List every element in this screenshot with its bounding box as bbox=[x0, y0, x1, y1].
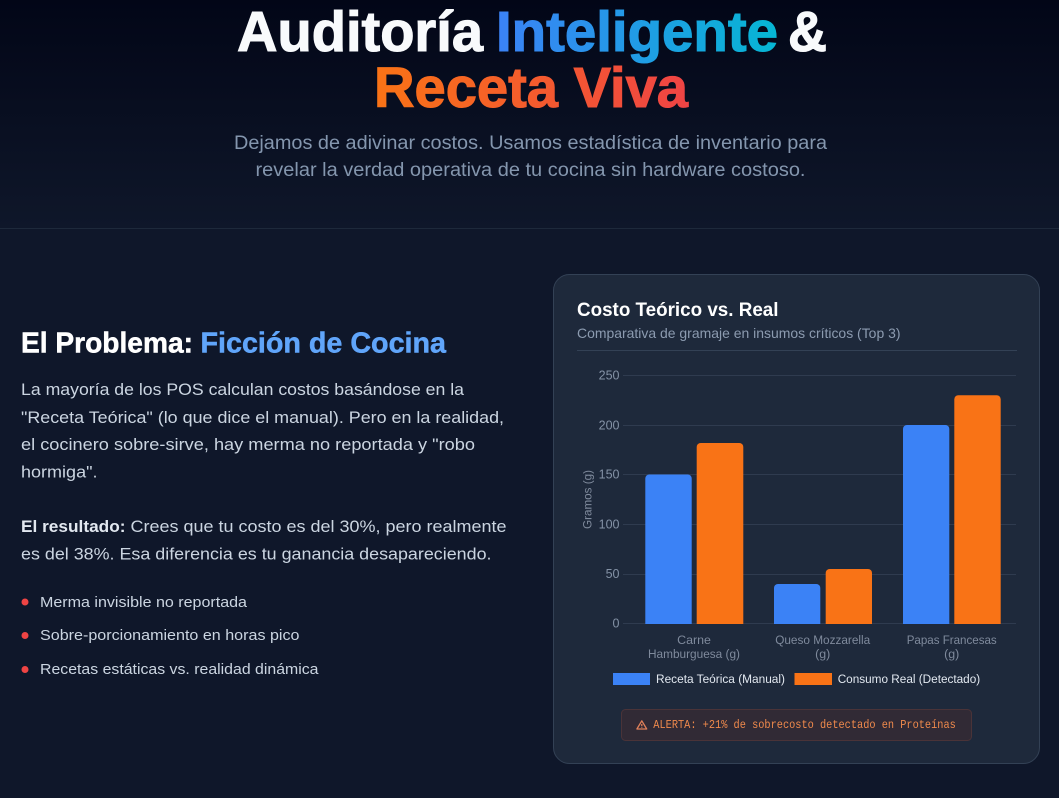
header bbox=[234, 0, 827, 181]
title: Auditoría bbox=[237, 0, 484, 64]
y axis labels: 0 bbox=[613, 616, 620, 630]
y axis title: Gramos (g) bbox=[580, 470, 594, 529]
panel: el problema bbox=[21, 328, 506, 678]
paragraph: el resultado: es del 38%. Esa diferencia es tu ganancia desapareciendo. bbox=[21, 544, 492, 564]
x axis labels: Carne bbox=[677, 633, 711, 647]
title: & bbox=[788, 0, 827, 64]
y axis labels: 250 bbox=[599, 368, 620, 382]
paragraph: el resultado: El resultado: bbox=[21, 517, 126, 536]
y axis labels: 100 bbox=[599, 518, 620, 532]
x axis labels: Queso Mozzarella bbox=[775, 633, 870, 647]
panel: costo teórico vs real bbox=[554, 274, 1040, 764]
paragraph: receta teórica bbox=[21, 380, 504, 482]
bars: consumo real bbox=[697, 395, 1001, 624]
title: Inteligente bbox=[496, 0, 778, 64]
callout: alerta bbox=[622, 710, 972, 740]
y axis labels: 50 bbox=[606, 567, 620, 581]
subtitle: Dejamos de adivinar costos. Usamos estadística de inventario para bbox=[234, 133, 827, 154]
x axis labels: Hamburguesa (g) bbox=[648, 647, 740, 661]
y axis labels: 200 bbox=[599, 418, 620, 432]
bullet list: Sobre-porcionamiento en horas pico bbox=[40, 627, 300, 644]
bullet list bbox=[22, 594, 319, 678]
paragraph: receta teórica: hormiga". bbox=[21, 462, 98, 482]
title bbox=[237, 0, 827, 120]
card subtitle: Comparativa de gramaje en insumos críticos (Top 3) bbox=[577, 326, 900, 341]
y axis labels bbox=[599, 368, 620, 630]
paragraph: el resultado bbox=[21, 517, 506, 564]
icon: warning triangle bbox=[637, 721, 647, 729]
x axis labels: Papas Francesas bbox=[907, 633, 997, 647]
title: Receta Viva bbox=[374, 56, 689, 120]
x axis labels bbox=[648, 633, 997, 661]
bar chart bbox=[580, 368, 1016, 686]
x axis labels: (g) bbox=[815, 647, 830, 661]
paragraph: receta teórica: el cocinero sobre-sirve, hay merma no reportada y "robo bbox=[21, 435, 475, 454]
paragraph: el resultado: Crees que tu costo es del 30%, pero realmente bbox=[130, 517, 506, 536]
legend bbox=[613, 672, 980, 686]
heading: Ficción de Cocina bbox=[200, 328, 447, 360]
heading bbox=[21, 328, 447, 360]
subtitle bbox=[234, 133, 827, 181]
paragraph: receta teórica: "Receta Teórica" (lo que dice el manual). Pero en la realidad, bbox=[21, 408, 504, 427]
bullet list: Recetas estáticas vs. realidad dinámica bbox=[40, 661, 319, 678]
subtitle: revelar la verdad operativa de tu cocina sin hardware costoso. bbox=[256, 160, 806, 181]
callout: alerta: ALERTA: +21% de sobrecosto detectado en Proteínas bbox=[653, 718, 956, 732]
legend: Receta Teórica (Manual) bbox=[656, 672, 785, 686]
x axis labels: (g) bbox=[944, 647, 959, 661]
paragraph: receta teórica: La mayoría de los POS calculan costos basándose en la bbox=[21, 380, 465, 399]
legend: Consumo Real (Detectado) bbox=[838, 672, 980, 686]
heading: El Problema: bbox=[21, 328, 193, 360]
card title: Costo Teórico vs. Real bbox=[577, 300, 778, 321]
y axis labels: 150 bbox=[599, 468, 620, 482]
bullet list: Merma invisible no reportada bbox=[40, 594, 248, 611]
bars: receta teórica bbox=[645, 425, 949, 624]
